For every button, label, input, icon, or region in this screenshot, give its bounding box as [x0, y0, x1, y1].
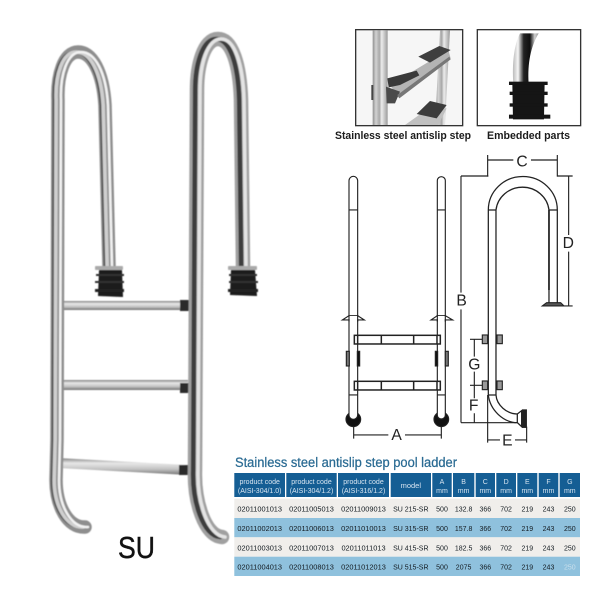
table row 2: 02011010013 [341, 524, 386, 533]
table row 2: 702 [500, 526, 512, 533]
table row 1: 250 [564, 506, 576, 514]
rung 1 [52, 300, 189, 311]
table row 4: 366 [479, 564, 491, 572]
main photo: stainless steel ladder [52, 39, 258, 537]
table row 4: 02011008013 [289, 562, 334, 572]
photo panel: embedded parts [477, 30, 581, 126]
dimension G: G [468, 357, 480, 374]
side view: bottom curve [488, 395, 526, 427]
front view: flanges [342, 315, 453, 322]
table row 4 [234, 557, 580, 576]
table row 2: 157.8 [455, 526, 472, 533]
side view: bolts [482, 335, 502, 390]
table row 3 [234, 537, 580, 557]
dimension E [488, 395, 527, 450]
dimension C: C [516, 153, 528, 170]
table row 3: 702 [500, 546, 512, 552]
table header: product code [343, 479, 384, 486]
front view: clamps [346, 351, 448, 366]
side view: arch and rail [488, 177, 557, 395]
table header: mm [521, 488, 533, 495]
table row 1: 702 [500, 506, 512, 514]
table row 3: 182.5 [455, 546, 472, 552]
table header: G [567, 479, 573, 486]
table row 4: 243 [543, 564, 554, 572]
table row 2: 500 [436, 526, 448, 533]
table row 4: 02011004013 [237, 562, 282, 572]
table row 2: SU 315-SR [393, 526, 429, 533]
table header: D [504, 479, 509, 486]
step 1 [386, 46, 451, 103]
model label: SU [118, 530, 155, 565]
table row 3: 250 [564, 546, 576, 552]
table row 3: 243 [543, 546, 554, 552]
black anchor [509, 82, 550, 119]
table row 1: 500 [436, 506, 448, 514]
table row 2: 243 [543, 526, 554, 533]
table header: product code [239, 479, 280, 486]
table row 2: 02011006013 [289, 524, 334, 533]
table header: (AISI-316/1.2) [342, 488, 385, 495]
photo panel: antislip step [356, 30, 463, 126]
table row 1 [234, 499, 580, 518]
table row 2: 250 [564, 526, 576, 533]
table header: mm [543, 488, 554, 495]
table row 4: 02011012013 [341, 562, 386, 572]
rung 2 [52, 379, 189, 393]
table row 4: 702 [500, 564, 512, 572]
table row 2 [234, 518, 580, 537]
table row 3: 500 [436, 546, 448, 552]
dimension G [468, 339, 482, 385]
step 2 [405, 101, 447, 125]
right tube [193, 39, 246, 537]
table row 1: 02011001013 [237, 504, 282, 514]
table header: (AISI-304/1.2) [290, 488, 333, 495]
technical drawing [342, 153, 574, 450]
dimension A [354, 427, 441, 444]
front view: left rail [349, 176, 358, 419]
table row 3: 366 [479, 546, 491, 552]
table row 4: 500 [436, 564, 448, 572]
front view: steps [354, 335, 440, 390]
table header: model [401, 481, 421, 490]
table row 3: 02011007013 [289, 544, 334, 552]
dimension B: B [456, 293, 467, 310]
table header: product code [291, 479, 332, 486]
left tube [52, 52, 112, 527]
table row 2: 02011002013 [237, 524, 282, 533]
rung 3 [52, 458, 189, 475]
front view: right rail [437, 177, 445, 419]
table row 3: 02011003013 [237, 544, 282, 552]
table header [234, 473, 580, 497]
table header: mm [458, 488, 470, 495]
table row 1: 243 [543, 506, 554, 514]
table header: mm [436, 488, 448, 495]
table row 3: 02011011013 [341, 544, 386, 552]
table row 1: 02011005013 [289, 504, 334, 514]
table row 1: SU 215-SR [393, 506, 429, 514]
table row 1: 366 [479, 506, 491, 514]
caption: antislip step: Stainless steel antislip step [335, 130, 472, 142]
table header: A [440, 479, 445, 486]
dimension D [557, 176, 574, 306]
table row 3: SU 415-SR [393, 546, 429, 552]
dimension E: E [502, 433, 513, 450]
table row 4: 250 [564, 564, 576, 572]
curved tube [513, 33, 539, 83]
dimension A: A [391, 427, 402, 444]
table row 4: 2075 [456, 564, 471, 572]
table header: mm [479, 488, 491, 495]
table row 4: SU 515-SR [393, 564, 429, 572]
dimension C [488, 153, 557, 177]
caption: embedded parts: Embedded parts [487, 130, 570, 142]
dimension B [456, 176, 517, 423]
left rail [371, 30, 388, 125]
table row 1: 219 [521, 506, 533, 514]
table row 2: 219 [521, 526, 533, 533]
table header: C [483, 479, 488, 486]
dimension F [469, 385, 478, 423]
table header: B [461, 479, 466, 486]
dimension D: D [563, 235, 574, 252]
table row 1: 132.8 [455, 506, 472, 514]
table row 1: 02011009013 [341, 504, 386, 514]
table row 2: 366 [479, 526, 491, 533]
table row 4: 219 [521, 564, 533, 572]
dimension F: F [469, 398, 478, 415]
table header: mm [564, 488, 576, 495]
right rail [435, 30, 450, 125]
table header: F [546, 479, 551, 486]
table header: E [525, 479, 530, 486]
table header: (AISI-304/1.0) [238, 488, 281, 495]
specification table [234, 473, 580, 576]
table row 3: 219 [521, 546, 533, 552]
left anchor [95, 266, 124, 297]
table header: mm [500, 488, 512, 495]
front view: feet [346, 412, 449, 427]
right anchor [228, 266, 258, 296]
side view: top flange [542, 303, 564, 306]
table title: Stainless steel antislip step pool ladder [235, 455, 457, 470]
